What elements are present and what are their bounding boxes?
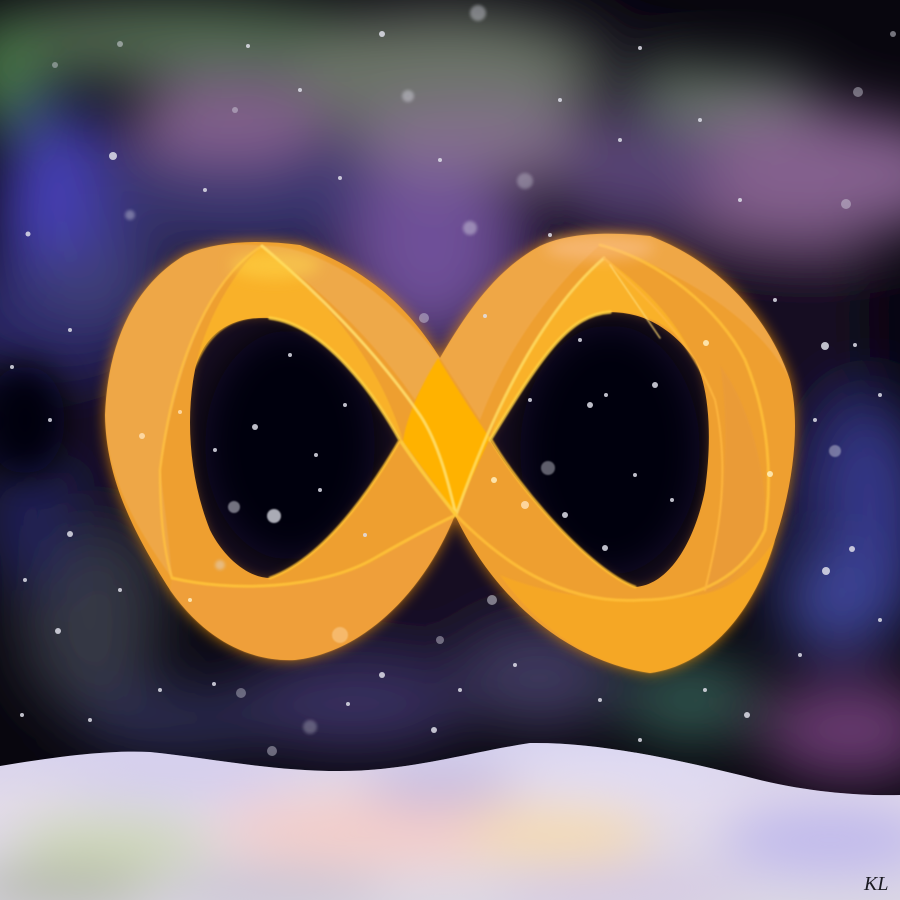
ribbon body — [105, 234, 795, 673]
highlight: top of left loop — [230, 251, 320, 279]
right yellow crescent — [490, 258, 695, 438]
coloured reflections on snow — [0, 752, 900, 900]
left yellow crescent — [195, 246, 403, 440]
bright ribbon edges — [160, 245, 768, 600]
snow surface — [0, 743, 900, 900]
artist signature: KL — [863, 873, 888, 895]
bright central crossing — [403, 358, 490, 515]
upper band left — [262, 246, 440, 400]
upper band right — [440, 234, 790, 420]
infinity ribbon — [105, 234, 795, 673]
lower bands — [170, 515, 455, 660]
infinity glow halo — [105, 234, 795, 673]
left loop outer fold — [105, 244, 262, 578]
highlight: top of right loop — [545, 236, 655, 260]
right outer fold — [705, 365, 766, 592]
snow ground — [0, 743, 900, 900]
